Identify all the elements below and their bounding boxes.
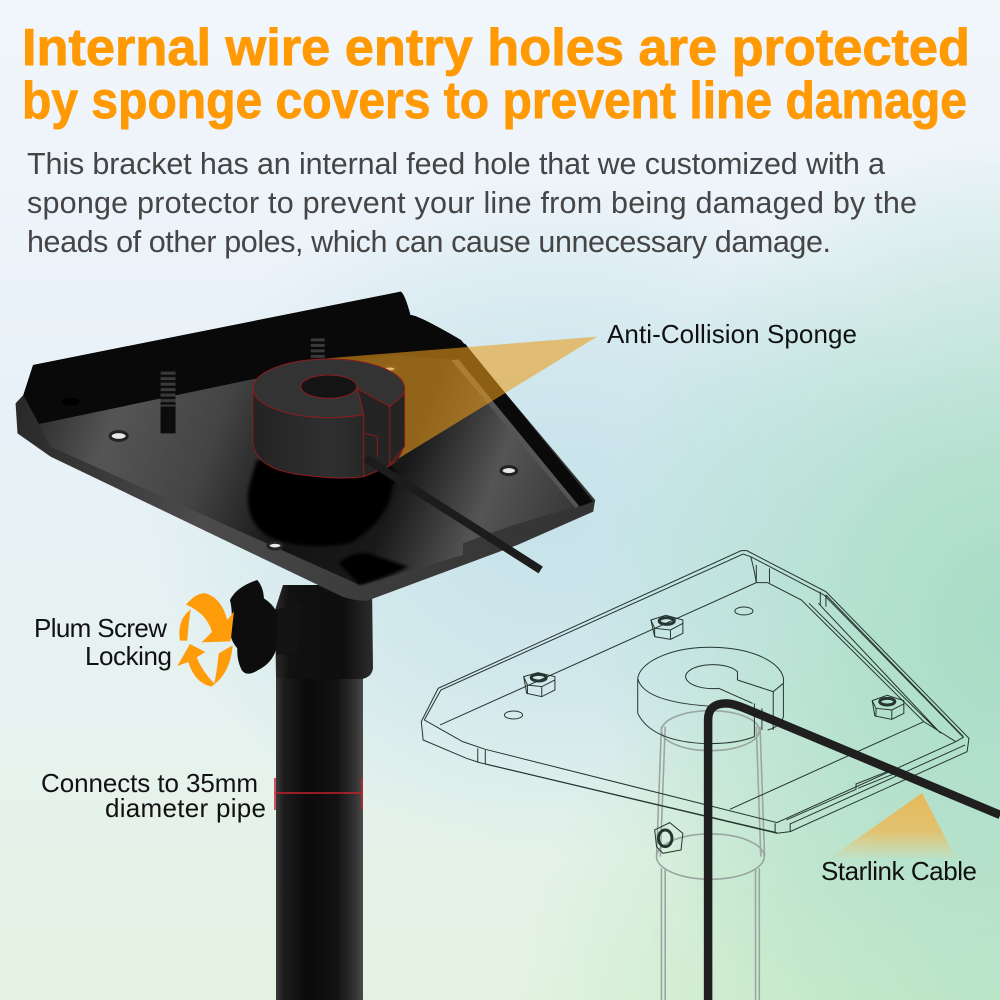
- mounting holes: [110, 366, 517, 549]
- wireframe pole: [657, 711, 765, 1000]
- label: plum screw locking: [34, 613, 172, 671]
- label: pipe diameter: [41, 768, 266, 823]
- title: Internal wire entry holes are protected: [22, 19, 970, 77]
- description text: sponge protector to prevent your line from being damaged by the: [27, 186, 917, 220]
- cable: [366, 458, 541, 570]
- threaded studs: [168, 338, 318, 433]
- title: [22, 19, 970, 130]
- starlink cable pointer wedge: [830, 793, 956, 858]
- black support pole: [275, 585, 373, 1000]
- sponge: [253, 359, 405, 478]
- tray floor: [39, 355, 576, 585]
- label: plum screw locking: Locking: [85, 641, 172, 671]
- icon: orange rotation arrows: [177, 593, 234, 687]
- right lip: [451, 359, 580, 508]
- tray outer body: [16, 292, 595, 601]
- description text: heads of other poles, which can cause unnecessary damage.: [27, 225, 831, 259]
- tray: black mounting plate with sponge: [16, 292, 597, 601]
- description text: [27, 147, 917, 259]
- description text: This bracket has an internal feed hole that we customized with a: [27, 147, 885, 181]
- back wall: [23, 292, 584, 493]
- amber highlight wedge: [327, 337, 597, 458]
- wireframe nuts: [524, 615, 904, 853]
- icon: plum screw knob: [230, 580, 302, 674]
- wireframe sponge: [638, 647, 784, 744]
- cable: [708, 703, 1000, 1000]
- dimension marker: pipe diameter: [275, 778, 362, 810]
- label: pipe diameter: diameter pipe: [105, 793, 266, 823]
- label: pipe diameter: Connects to 35mm: [41, 768, 258, 798]
- label: starlink cable: Starlink Cable: [821, 856, 977, 886]
- label: plum screw locking: Plum Screw: [34, 613, 167, 643]
- wireframe tray: [421, 551, 969, 833]
- wireframe drawing of bracket: [421, 551, 1000, 1000]
- label: anti-collision sponge: Anti-Collision Sponge: [607, 319, 857, 349]
- reflection of sponge: [248, 460, 408, 585]
